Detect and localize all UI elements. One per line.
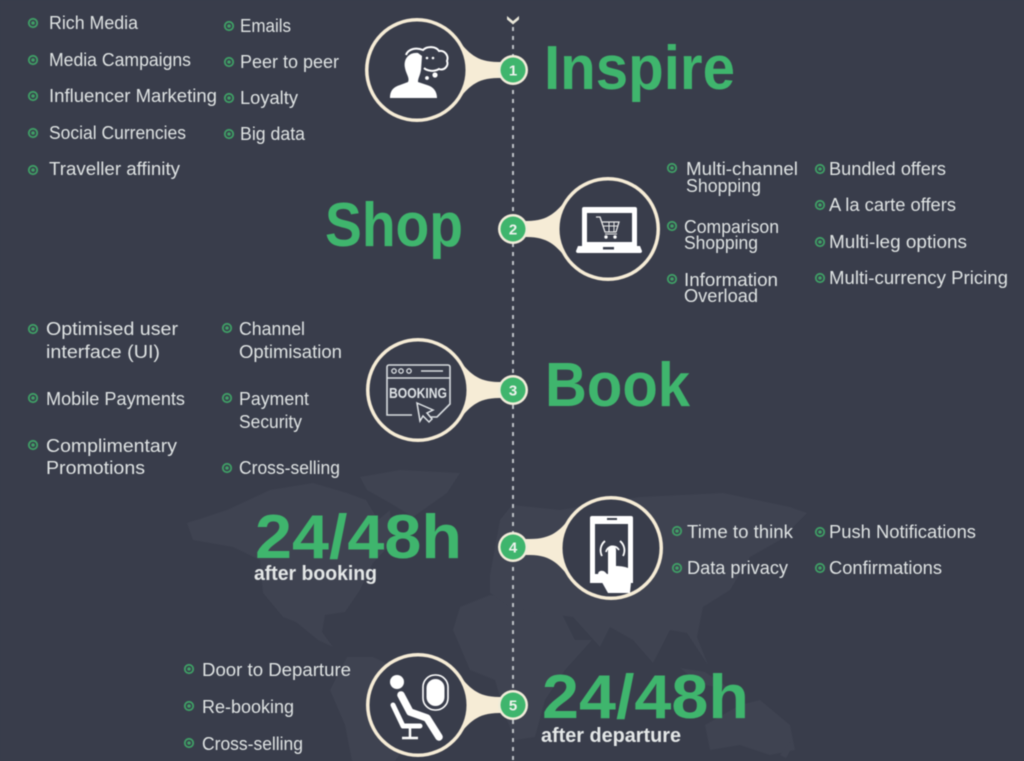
list: shop right column: A la carte offers: [829, 195, 956, 215]
list: shop right column: [816, 159, 1008, 288]
world map background: [187, 470, 807, 761]
list: book right column: Cross-selling: [239, 458, 340, 478]
connector badge 4: [498, 496, 663, 600]
list: book left column: interface (UI): [46, 342, 160, 362]
list: book right column: [223, 319, 342, 478]
list: book left column: Mobile Payments: [46, 389, 185, 409]
list: inspire right column: Big data: [240, 124, 306, 144]
list: after departure: Cross-selling: [202, 734, 303, 754]
list: book right column: Optimisation: [239, 342, 342, 362]
list: inspire left column: Rich Media: [49, 13, 139, 33]
step 5: after departure: [185, 653, 749, 757]
list: shop left column: Multi-channel: [686, 159, 798, 179]
list: inspire left column: Media Campaigns: [49, 50, 191, 70]
list: book right column: Channel: [239, 319, 305, 339]
step 2: shop: [325, 159, 1008, 306]
heading: Book: Book: [545, 351, 690, 420]
list: after departure: Door to Departure: [202, 660, 351, 680]
connector badge 5: 5: [509, 698, 517, 714]
list: inspire right column: Peer to peer: [240, 52, 339, 72]
connector badge 1: 1: [509, 62, 517, 80]
list: after booking left column: Data privacy: [687, 558, 788, 578]
heading: Shop: Shop: [325, 191, 463, 260]
connector badge 4: 4: [509, 540, 518, 556]
list: shop left column: Overload: [684, 286, 758, 306]
list: shop left column: [668, 159, 798, 306]
list: inspire left column: [29, 13, 217, 179]
list: shop left column: Information: [684, 270, 778, 290]
list: shop left column: Comparison: [684, 217, 779, 237]
list: book right column: Security: [239, 412, 302, 432]
step 4: after booking: [254, 496, 976, 600]
list: book left column: Promotions: [46, 458, 145, 478]
list: inspire right column: Loyalty: [240, 88, 298, 108]
list: after booking left column: [673, 522, 794, 578]
icon: booking window: BOOKING: [389, 385, 447, 402]
step 1: inspire: [29, 13, 735, 179]
list: book left column: [29, 319, 185, 478]
heading: 24/48h after departure: after departure: [541, 725, 681, 747]
list: inspire left column: Social Currencies: [49, 123, 186, 143]
icon: phone touch: [590, 516, 633, 593]
list: book right column: Payment: [239, 389, 309, 409]
list: inspire right column: Emails: [240, 16, 291, 36]
icon: booking window: [387, 365, 450, 422]
list: book left column: Optimised user: [46, 319, 178, 339]
list: after booking right column: Confirmations: [829, 558, 942, 578]
list: after booking right column: Push Notifications: [829, 522, 976, 542]
list: book left column: Complimentary: [46, 436, 177, 456]
list: shop right column: Multi-leg options: [829, 232, 967, 252]
list: after booking right column: [816, 522, 976, 578]
list: shop left column: Shopping: [684, 233, 758, 253]
connector badge 3: [366, 338, 528, 442]
timeline dotted line: [507, 16, 519, 761]
icon: laptop with cart: [576, 207, 642, 253]
list: inspire left column: Traveller affinity: [49, 159, 180, 179]
list: after departure: Re-booking: [202, 697, 294, 717]
heading: Inspire: Inspire: [544, 34, 735, 103]
list: inspire left column: Influencer Marketing: [49, 86, 217, 106]
heading: 24/48h after booking: 24/48h: [255, 503, 462, 572]
connector badge 2: 2: [509, 222, 517, 238]
list: after departure: [185, 660, 351, 754]
list: inspire right column: [225, 16, 339, 144]
list: shop left column: Shopping: [686, 176, 761, 196]
connector badge 3: 3: [509, 382, 517, 400]
connector badge 5: [366, 653, 528, 757]
heading: 24/48h after departure: 24/48h: [542, 663, 749, 732]
list: shop right column: Multi-currency Pricing: [829, 268, 1008, 288]
heading: 24/48h after booking: after booking: [254, 563, 377, 585]
connector badge 1: [365, 18, 528, 122]
step 3: book: [29, 319, 690, 478]
connector badge 2: [498, 177, 660, 281]
icon: seated passenger by window: [390, 675, 448, 738]
list: shop right column: Bundled offers: [829, 159, 946, 179]
icon: person thinking: [390, 47, 448, 98]
icon: timeline chevron: [507, 16, 519, 24]
list: after booking left column: Time to think: [687, 522, 794, 542]
